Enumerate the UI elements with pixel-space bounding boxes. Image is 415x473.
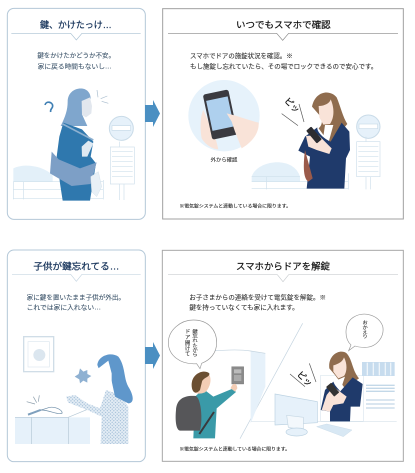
- text: unlock description: お子さまからの連絡を受けて電気錠を解錠。※: [189, 292, 326, 301]
- text: child description: これでは家に入れない…: [27, 302, 101, 311]
- text: key worry description: 家に戻る時間もないし…: [38, 61, 112, 70]
- speech bubble: child: 鍵忘れたから: [191, 328, 198, 358]
- heading divider: [11, 33, 141, 40]
- speech bubble: child: [168, 320, 217, 369]
- illustration: table with key: [15, 395, 90, 444]
- panel: unlock by smartphone: [162, 250, 403, 461]
- speech bubble: child: ドア開けて: [184, 329, 190, 357]
- illustration: computer monitor and keyboard: [275, 394, 352, 437]
- arrow: top: [145, 100, 160, 127]
- illustration: phone in hand circle: [188, 80, 260, 151]
- heading: child forgot key: 子供が鍵忘れてる…: [33, 261, 119, 272]
- illustration: wall picture: [24, 337, 54, 372]
- illustration: woman at desk with phone: [321, 352, 363, 421]
- label: from outside: 外から確認: [211, 155, 238, 163]
- footnote: ※電気錠システムと連動している場合に限ります。: [179, 446, 290, 453]
- heading: key worry: 鍵、かけたっけ…: [40, 19, 112, 30]
- sound effect: beep: ピッ: [282, 96, 302, 115]
- illustration: door and room lines: [210, 323, 397, 439]
- illustration: worried woman: [45, 89, 108, 201]
- panel: check by smartphone: [163, 9, 403, 219]
- speech bubble: woman: おかえり: [361, 320, 368, 339]
- illustration: intercom panel: [232, 367, 244, 384]
- text: unlock description: 鍵を持っていなくても家に入れます。: [189, 302, 299, 311]
- footnote: ※電気錠システムと連動している場合に限ります。: [179, 202, 291, 209]
- sound effect: beep: [290, 363, 316, 388]
- text: check description: もし施錠し忘れていたら、その場でロックできるので安心です。: [190, 62, 377, 71]
- panel: key worry: [7, 8, 145, 219]
- heading: unlock by smartphone: スマホからドアを解錠: [236, 261, 330, 272]
- heading divider: [168, 33, 398, 40]
- panel: child forgot key: [7, 250, 145, 462]
- heading: check by smartphone: いつでもスマホで確認: [236, 19, 331, 30]
- heading divider: [168, 275, 398, 282]
- arrow: bottom: [145, 342, 160, 369]
- illustration: bus stop background: [13, 116, 134, 200]
- sound effect: beep: ピッ: [295, 369, 314, 388]
- illustration: child with backpack: [176, 372, 237, 438]
- text: check description: スマホでドアの施錠状況を確認。※: [190, 51, 293, 60]
- heading divider: [12, 274, 141, 281]
- illustration: woman with phone: [298, 93, 350, 189]
- illustration: woman at home: [66, 354, 133, 444]
- sound effect: beep: [282, 96, 304, 126]
- text: child description: 家に鍵を置いたまま子供が外出。: [27, 292, 125, 301]
- illustration: bus stop background: [252, 115, 380, 189]
- illustration: worried mark: [75, 368, 91, 383]
- text: key worry description: 鍵をかけたかどうか不安。: [37, 51, 115, 60]
- speech bubble: woman: [346, 314, 383, 351]
